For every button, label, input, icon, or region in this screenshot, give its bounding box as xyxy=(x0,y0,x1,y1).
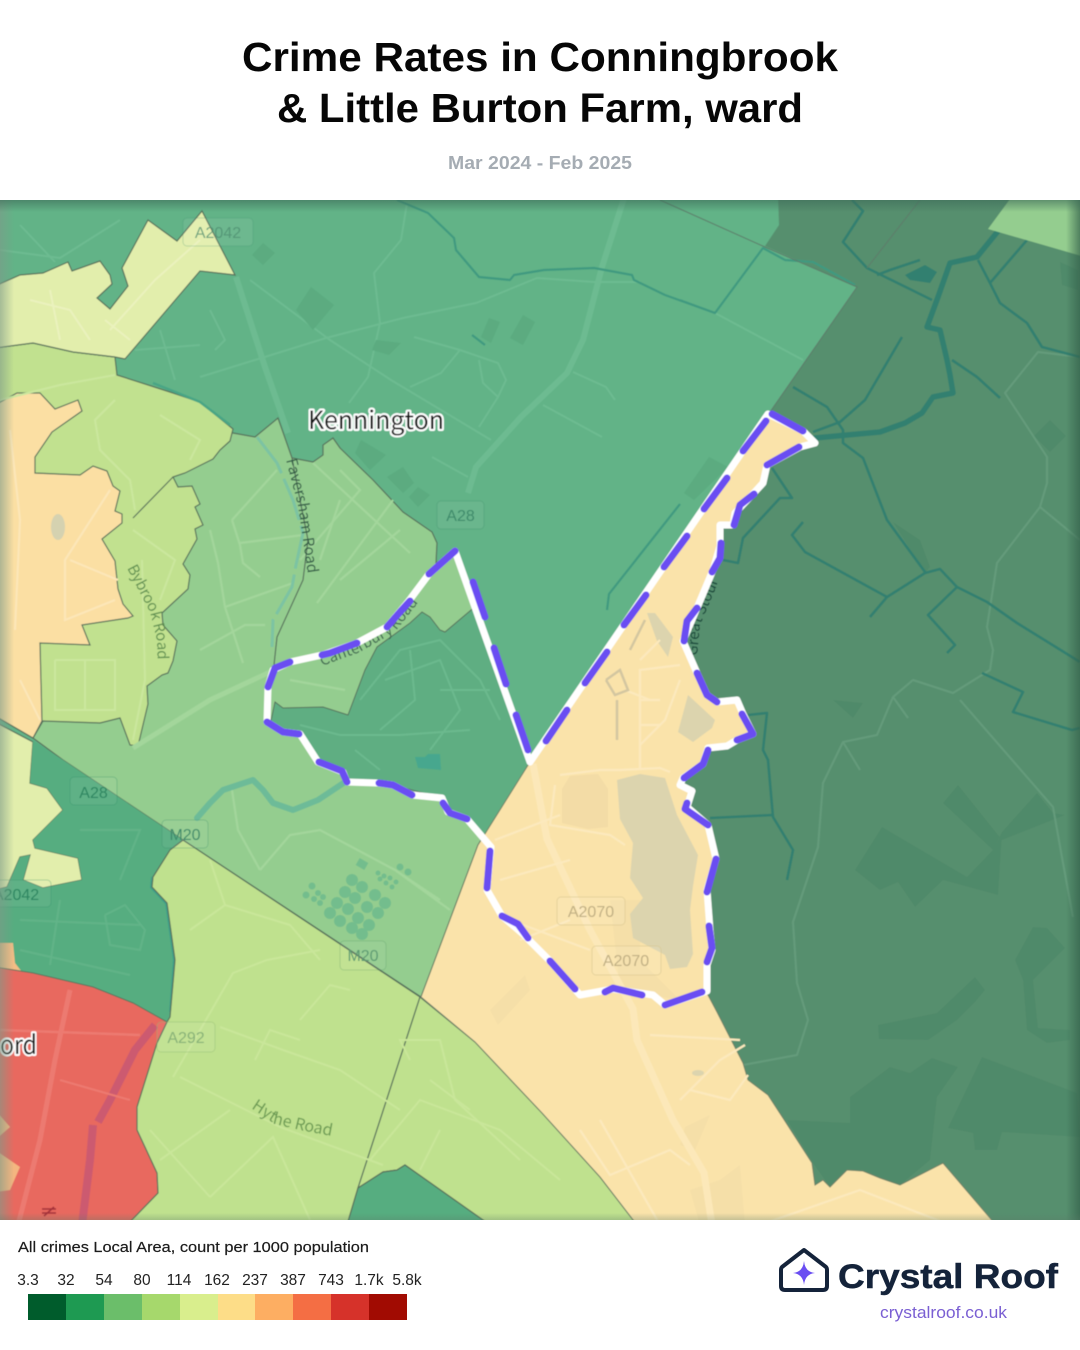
north region streams xyxy=(397,200,855,610)
building footprints in ward xyxy=(606,620,645,740)
pale north-west region xyxy=(0,211,235,359)
road name: Bybrook Road: Bybrook Road xyxy=(128,564,170,659)
country lanes east xyxy=(743,352,1080,1065)
north region roads xyxy=(0,195,803,493)
river channel south-west xyxy=(152,877,175,1012)
pond in ward xyxy=(415,754,441,770)
legend values: 5.8k xyxy=(392,1272,422,1289)
title: & Little Burton Farm, ward xyxy=(277,85,803,131)
darker cream farmland south xyxy=(490,900,745,1225)
road name: Canterbury Road: Canterbury Road xyxy=(320,600,418,665)
logo: Crystal Roof xyxy=(781,1250,1059,1322)
central light green region xyxy=(33,417,480,997)
road shield: M20 west xyxy=(162,820,208,848)
road shield: A2042 south-west xyxy=(0,880,51,907)
Faversham Road boundary line xyxy=(274,458,308,665)
logo wordmark: Crystal Roof xyxy=(838,1258,1059,1296)
cream western region xyxy=(0,393,133,738)
place name: Ashford, cropped: ord xyxy=(0,1025,37,1062)
orange patch at south-west xyxy=(0,943,22,972)
legend values: 3.3 xyxy=(17,1272,39,1289)
pond west xyxy=(51,514,65,540)
legend values: 162 xyxy=(204,1272,230,1289)
dark green low-crime region east xyxy=(678,195,1080,1225)
legend colour scale xyxy=(28,1294,407,1320)
streams east xyxy=(710,200,1080,880)
tan park patch xyxy=(562,774,608,829)
road name: Hythe Road: Hythe Road xyxy=(252,1099,333,1136)
website url: crystalroof.co.uk xyxy=(880,1303,1008,1322)
legend values: 114 xyxy=(167,1272,192,1289)
yellow-green southern region xyxy=(358,997,637,1225)
cream main region xyxy=(421,414,996,1225)
road shield: M20 south xyxy=(340,941,386,970)
title xyxy=(242,34,838,131)
top-right corner region xyxy=(988,195,1080,257)
choropleth map panel xyxy=(0,200,1080,1220)
railway and roads in red region xyxy=(0,990,155,1225)
icon: house with star xyxy=(781,1250,827,1290)
ward boundary: purple dashes xyxy=(267,414,803,1005)
title: Crime Rates in Conningbrook xyxy=(242,34,838,80)
legend values xyxy=(17,1272,422,1289)
road shield: M20 west: M20 xyxy=(169,827,201,844)
streets in ward estate xyxy=(300,640,500,770)
road shield: A2042 north xyxy=(183,218,253,246)
road shield: M20 south: M20 xyxy=(347,948,379,965)
rail station icon xyxy=(42,1207,56,1216)
red high-crime region xyxy=(0,967,167,1225)
legend title: All crimes Local Area, count per 1000 population xyxy=(18,1239,369,1256)
streets in central light green xyxy=(133,463,450,910)
orange patches in red xyxy=(0,1110,20,1192)
road shield: A292: A292 xyxy=(167,1030,205,1047)
road shield: A2070 lower: A2070 xyxy=(603,953,649,970)
place name: Kennington: Kennington xyxy=(308,401,444,437)
north low-crime region xyxy=(0,200,857,754)
road shield: A2070 upper xyxy=(557,897,625,925)
subtitle: date range: Mar 2024 - Feb 2025 xyxy=(448,153,632,173)
green south-east inside ward xyxy=(270,605,530,841)
road shield: A28 west: A28 xyxy=(79,785,108,802)
road shield: A28 north xyxy=(437,501,484,529)
lakes in ward xyxy=(617,613,715,1076)
road shield: A292 xyxy=(157,1022,215,1052)
legend values: 80 xyxy=(133,1272,151,1289)
yellow-green Hythe region xyxy=(127,840,420,1225)
streets in western regions xyxy=(0,375,200,740)
legend values: 1.7k xyxy=(354,1272,384,1289)
legend values: 387 xyxy=(280,1272,306,1289)
road shield: A28 west xyxy=(70,777,117,805)
ward boundary: white casing xyxy=(267,414,815,1005)
road name: Great Stour: Great Stour xyxy=(690,581,718,655)
legend values: 237 xyxy=(242,1272,268,1289)
lake east xyxy=(905,265,937,283)
pale south-west region xyxy=(0,722,82,890)
road shield: A28 north: A28 xyxy=(446,508,475,525)
legend values: 54 xyxy=(95,1272,113,1289)
stream in central light green xyxy=(257,437,303,647)
north region patches xyxy=(305,320,378,350)
inner ward boundary line west xyxy=(133,477,173,518)
yellow-green western region xyxy=(0,343,233,746)
sewage works tree cluster xyxy=(302,858,412,940)
road shield: A2042 north: A2042 xyxy=(195,225,241,242)
river channel along north-west boundary xyxy=(153,383,230,425)
road shield: A2070 upper: A2070 xyxy=(568,904,614,921)
river Stour central xyxy=(197,780,345,818)
green wedge at bottom xyxy=(350,1166,480,1220)
streets in cream west xyxy=(10,430,118,720)
legend values: 32 xyxy=(57,1272,75,1289)
cream area streets xyxy=(495,640,950,1225)
green south-west region xyxy=(0,740,183,1022)
road name: Faversham Road: Faversham Road xyxy=(286,458,320,573)
map edge shading xyxy=(0,200,1080,1220)
streets in pale region xyxy=(30,240,200,340)
streets in south-west green xyxy=(20,830,145,975)
woodland patches east xyxy=(787,262,1080,1187)
road shield: A2070 lower xyxy=(592,946,661,975)
legend values: 743 xyxy=(318,1272,344,1289)
main road A2070 xyxy=(533,764,712,1225)
streets in Hythe region xyxy=(150,860,560,1220)
river east xyxy=(815,225,1003,438)
north boundary lines xyxy=(660,200,920,412)
legend xyxy=(17,1239,422,1320)
